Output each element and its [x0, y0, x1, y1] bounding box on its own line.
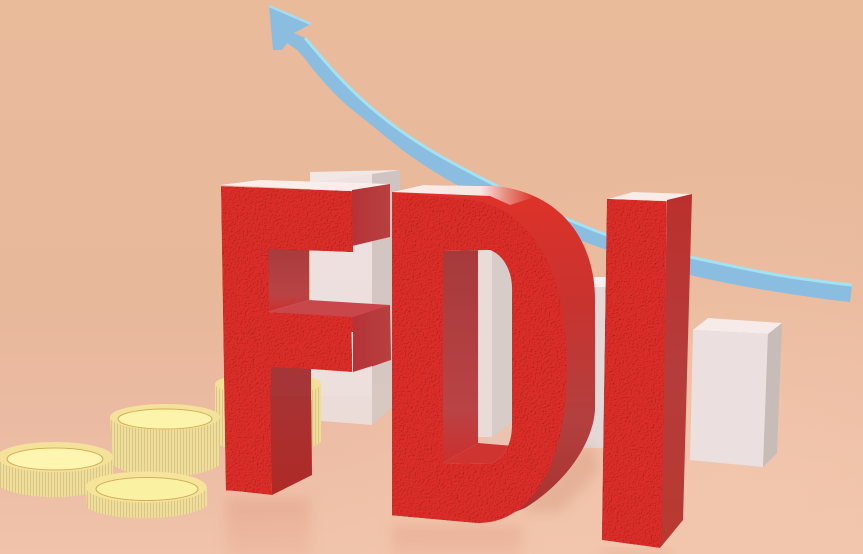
- letter D 3D depth: [392, 185, 595, 522]
- letter F 3D depth: [220, 180, 391, 495]
- letter I 3D depth: [608, 192, 692, 548]
- coin: front single coin: [86, 472, 207, 518]
- arrow: rising growth curve: [269, 6, 852, 302]
- chart bar: back bar behind F: [310, 170, 400, 425]
- coin stack: back stack behind F: [215, 373, 321, 456]
- coin stack: middle stack: [110, 404, 220, 477]
- letter D counter showing wall, bar and floor: [443, 250, 512, 464]
- area under the F middle arm: [271, 366, 372, 400]
- coin stack: left stack: [0, 442, 113, 497]
- chart bar: centre bar behind D and I: [540, 277, 610, 448]
- chart bar: right bar: [690, 318, 782, 467]
- floor reflections of the letters: [226, 440, 672, 554]
